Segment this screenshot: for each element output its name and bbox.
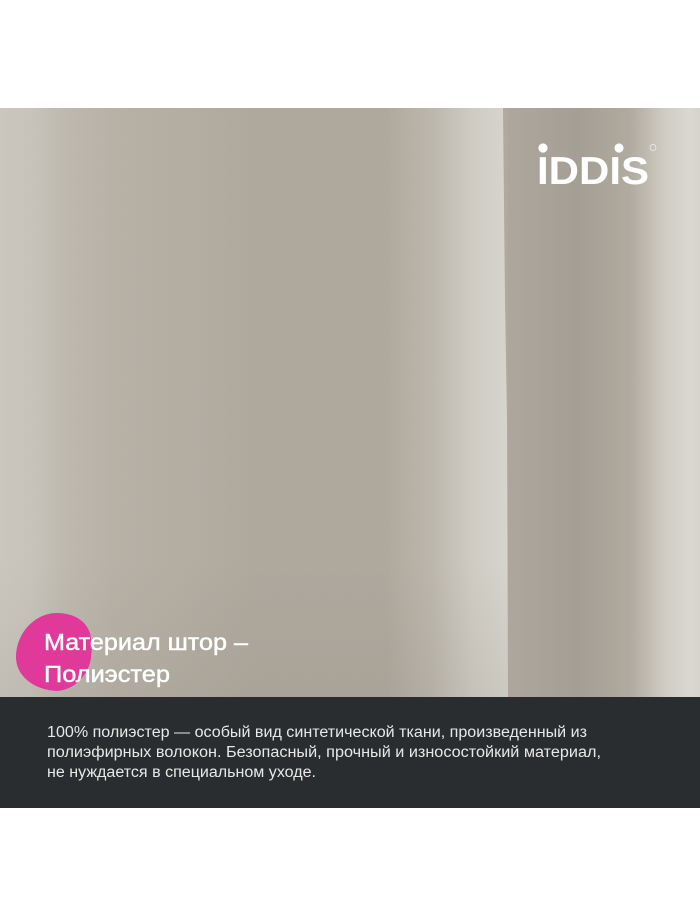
description text: 100% полиэстер — особый вид синтетической ткани, произведенный из	[47, 724, 587, 741]
logo: IDDIS: IDDIS	[537, 150, 649, 193]
heading: Материал штор –	[44, 629, 248, 655]
heading: Полиэстер	[44, 661, 170, 687]
panel: dark description band	[0, 697, 700, 808]
description text: не нуждается в специальном уходе.	[47, 764, 316, 781]
panel: curtain fabric photo	[0, 108, 700, 697]
pink blob accent	[16, 613, 92, 691]
description text	[47, 724, 601, 781]
heading	[44, 629, 248, 687]
description text: полиэфирных волокон. Безопасный, прочный и износостойкий материал,	[47, 744, 601, 761]
